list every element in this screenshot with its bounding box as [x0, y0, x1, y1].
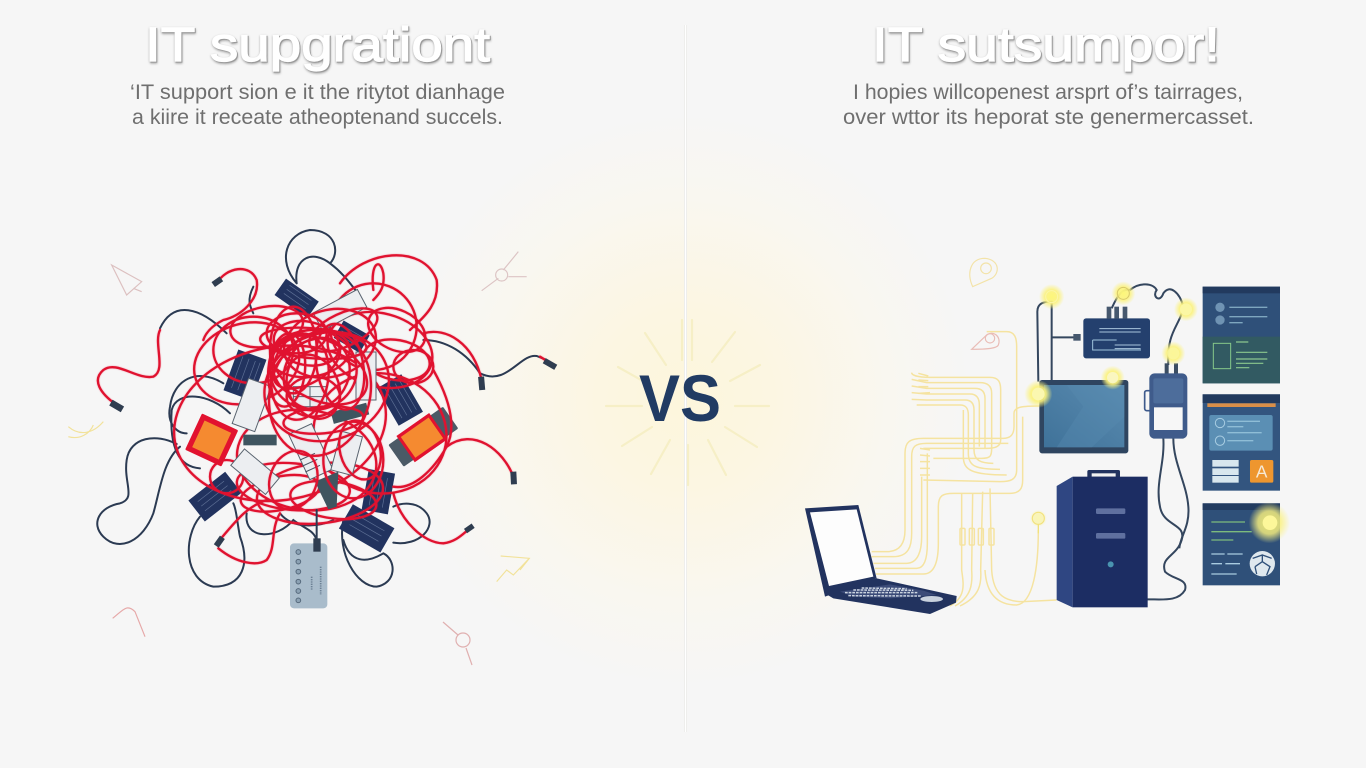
app panel: dashboard three [1203, 503, 1280, 585]
text block: right description [843, 81, 1254, 129]
red cables: outer loops [98, 255, 553, 563]
server tower [1057, 470, 1148, 607]
tablet [1039, 380, 1128, 453]
text block: left description [130, 81, 505, 129]
laptop [805, 505, 957, 614]
icon: faint red pin doodle [443, 622, 472, 665]
dark cables [97, 230, 547, 587]
icon: doodles [970, 258, 999, 349]
text block: left description: ‘IT support sion e it the ritytot dianhage [130, 81, 505, 104]
cable connectors [109, 276, 557, 548]
icon: glowing nodes [1024, 281, 1290, 543]
yellow circuit traces [872, 332, 1057, 606]
app panel: dashboard one [1203, 287, 1280, 383]
icon: remote control [290, 510, 327, 608]
heading: left title: IT supgrationt [145, 19, 490, 72]
text block: right description: I hopies willcopenest arsprt of’s tairrages, [853, 81, 1243, 104]
dark wires [1037, 284, 1189, 600]
red cables: dense core [249, 299, 404, 516]
icon: VS sunburst rays [606, 320, 769, 485]
orange modules [185, 404, 460, 469]
text block: right description: over wttor its heporat ste genermercasset. [843, 106, 1254, 129]
heading: right title: IT sutsumpor! [872, 19, 1220, 72]
heading: VS: VS [639, 361, 721, 435]
app panel: dashboard two: A [1256, 461, 1268, 481]
network switch [1073, 307, 1150, 358]
panel: tangled cables illustration [68, 230, 557, 637]
portable device [1145, 363, 1187, 439]
white adapters [231, 289, 376, 509]
panel: organised IT network illustration [805, 258, 1290, 614]
navy power bricks [188, 279, 423, 552]
icon: faint doodles around the tangle [68, 252, 529, 637]
app panel: dashboard two [1203, 394, 1280, 491]
text block: left description: a kiire it receate atheoptenand succels. [132, 106, 503, 129]
